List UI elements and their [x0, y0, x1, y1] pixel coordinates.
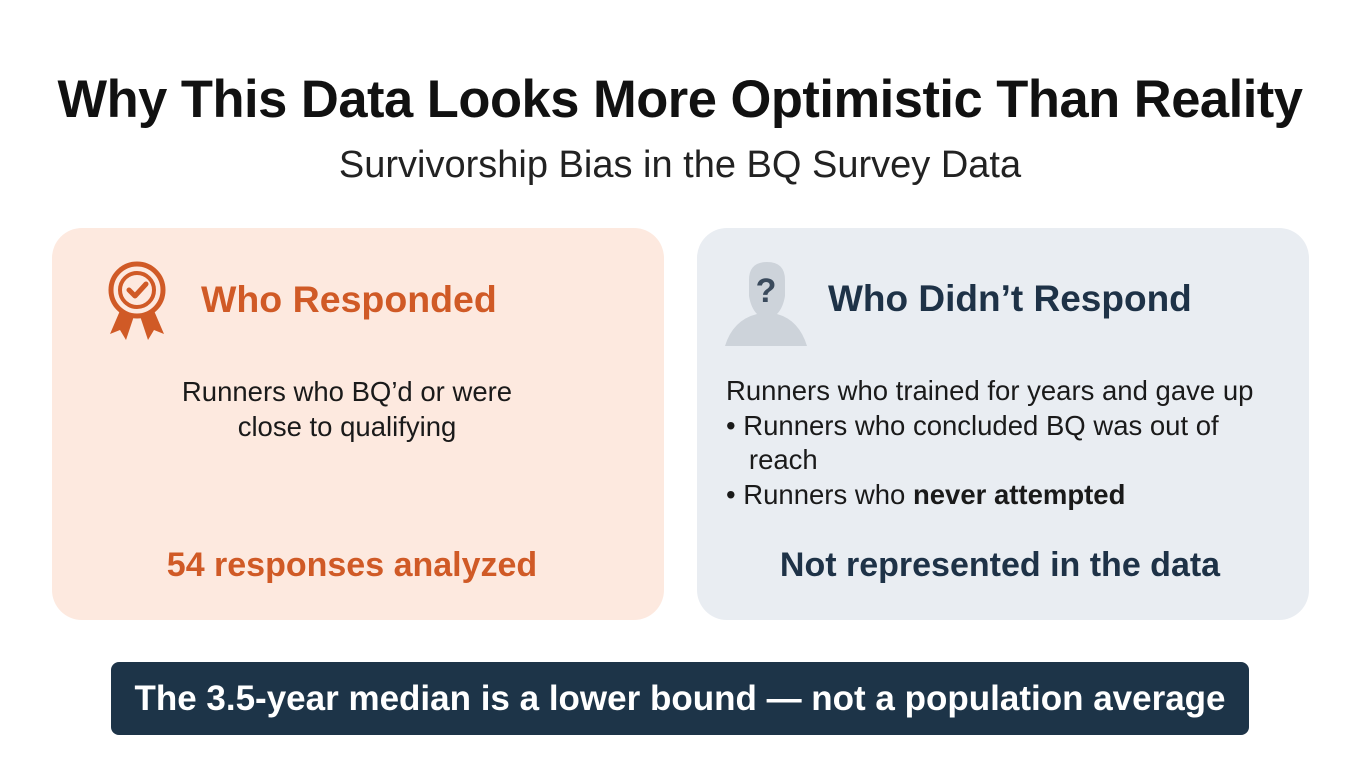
- banner: The 3.5-year median is a lower bound — not a population average: [134, 679, 1226, 718]
- body text: Runners who BQ’d or were: [182, 376, 512, 407]
- bullet list: [726, 375, 1253, 510]
- stat: 54 responses analyzed: [167, 546, 537, 584]
- bullet list: Runners who trained for years and gave up: [726, 375, 1253, 406]
- heading: Who Responded: [201, 278, 497, 320]
- body text: [182, 376, 512, 442]
- bullet list: • Runners who never attempted: [726, 478, 1125, 510]
- panel: who didn't respond: [697, 228, 1309, 620]
- body text: close to qualifying: [238, 411, 456, 442]
- icon: award ribbon: [108, 262, 166, 340]
- heading: Who Didn’t Respond: [828, 278, 1192, 319]
- bullet list: • Runners who concluded BQ was out of: [726, 410, 1219, 440]
- title: Why This Data Looks More Optimistic Than Reality: [58, 70, 1302, 129]
- panel: who responded: [52, 228, 664, 620]
- stat: Not represented in the data: [780, 546, 1220, 584]
- icon: unknown person: [725, 262, 807, 346]
- icon: unknown person: ?: [756, 272, 776, 310]
- bullet list: reach: [749, 444, 818, 475]
- subtitle: Survivorship Bias in the BQ Survey Data: [339, 144, 1021, 186]
- banner: [111, 662, 1249, 735]
